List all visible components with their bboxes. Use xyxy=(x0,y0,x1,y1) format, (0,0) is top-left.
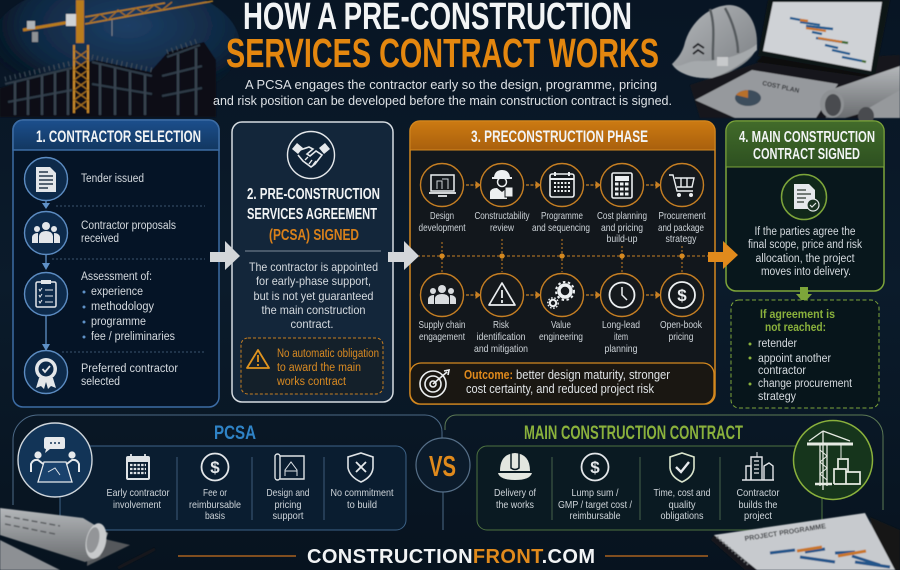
icon: fee dollar: $ xyxy=(210,458,220,477)
bottom row labels: identification xyxy=(476,331,526,343)
PCSA item labels xyxy=(106,487,394,522)
proposals text: received xyxy=(81,233,119,245)
VS badge xyxy=(416,438,470,492)
preferred contractor text xyxy=(81,363,178,388)
panel 2 description: The contractor is appointed xyxy=(249,260,378,274)
panel 4 description: If the parties agree the xyxy=(754,226,856,238)
callout options list: appoint another xyxy=(758,353,831,365)
image: project programme notebook: PROJECT PROGRAMME xyxy=(744,523,827,543)
icon: preferred contractor badge xyxy=(24,350,68,394)
top row labels: Procurement xyxy=(658,210,706,222)
icon: lump sum dollar: $ xyxy=(590,458,600,477)
subtitle: A PCSA engages the contractor early so the design, programme, pricing xyxy=(245,77,657,92)
callout options list: contractor xyxy=(758,365,806,377)
comparison: main construction contract xyxy=(445,415,883,530)
main contract item labels: reimbursable xyxy=(570,510,621,522)
panel 4: main construction contract signed xyxy=(726,121,884,291)
callout options list xyxy=(748,338,853,403)
top row labels: Cost planning xyxy=(597,210,647,222)
warning callout xyxy=(241,338,383,394)
icon: programme calendar xyxy=(540,164,584,206)
icon: cost calculator xyxy=(600,164,644,206)
top row labels: Constructability xyxy=(474,210,530,222)
panel 2 heading xyxy=(247,186,380,244)
panel 1 header xyxy=(13,120,219,150)
icon: signed contract xyxy=(782,174,826,220)
top row labels: and sequencing xyxy=(532,222,590,234)
bottom row labels: planning xyxy=(604,343,638,355)
main contract item labels: Contractor xyxy=(736,487,780,499)
icon: meeting over plans xyxy=(18,423,92,497)
bottom row labels: pricing xyxy=(668,331,694,343)
PCSA item labels: support xyxy=(272,510,304,522)
top row labels: and pricing xyxy=(601,222,643,234)
assessment criteria list: methodology xyxy=(91,301,154,313)
icon: supply chain people xyxy=(420,274,464,316)
bottom row labels: item xyxy=(614,331,628,343)
panel 4 header xyxy=(726,121,884,167)
panel 2 description: contract. xyxy=(290,317,334,331)
image: project programme notebook xyxy=(711,513,900,570)
icon: obligations shield xyxy=(670,453,694,482)
arrow: stage 2 to stage 3 xyxy=(388,241,419,270)
icon: design drawing roll xyxy=(275,454,304,480)
warning text xyxy=(276,348,379,388)
main contract item labels: quality xyxy=(668,499,696,511)
PCSA item labels: Early contractor xyxy=(106,487,170,499)
top row labels xyxy=(418,210,706,245)
warning text: No automatic obligation xyxy=(277,348,379,360)
bottom row labels: Supply chain xyxy=(418,319,466,331)
preferred contractor text: selected xyxy=(81,376,120,388)
bottom row labels: Long-lead xyxy=(602,319,640,331)
bottom row labels: Open-book xyxy=(660,319,703,331)
bottom row labels: engineering xyxy=(539,331,583,343)
outcome box xyxy=(410,363,714,404)
bottom row labels: engagement xyxy=(419,331,465,343)
icon: lump sum dollar xyxy=(582,454,608,480)
timeline axis xyxy=(412,182,708,298)
icon: early involvement calendar xyxy=(126,454,150,480)
assessment criteria list: Assessment of: xyxy=(81,271,152,283)
top row labels: strategy xyxy=(666,233,697,245)
laptop with gantt chart xyxy=(756,0,890,79)
cost plan sheet: COST PLAN xyxy=(762,80,800,95)
callout heading: not reached: xyxy=(765,320,826,334)
PCSA item labels: basis xyxy=(205,510,225,522)
icon: no commitment shield xyxy=(348,453,373,482)
proposals text: Contractor proposals xyxy=(81,220,176,232)
image: crane and building under construction xyxy=(0,0,240,117)
icon: buildings xyxy=(742,452,774,480)
panel 1 heading: 1. CONTRACTOR SELECTION xyxy=(36,127,201,146)
connector arrowheads xyxy=(42,203,50,351)
subtitle xyxy=(213,77,672,108)
tender issued text: Tender issued xyxy=(81,173,144,185)
icon: value engineering gears xyxy=(540,274,584,316)
icon: assessment clipboard xyxy=(24,272,68,316)
panel 4 description: final scope, price and risk xyxy=(748,239,862,251)
icon: tender document xyxy=(24,158,68,200)
bottom row labels: and mitigation xyxy=(474,343,528,355)
main contract item labels: Lump sum / xyxy=(572,487,619,499)
icon: contractors group xyxy=(24,212,68,254)
main contract item labels: GMP / target cost / xyxy=(558,499,632,511)
top row labels: build-up xyxy=(606,233,638,245)
callout options list: retender xyxy=(758,338,797,350)
top row labels: Programme xyxy=(541,210,583,222)
main contract heading: MAIN CONSTRUCTION CONTRACT xyxy=(524,423,743,444)
PCSA heading: PCSA xyxy=(214,423,256,444)
PCSA item labels: reimbursable xyxy=(189,499,241,511)
top row labels: and package xyxy=(658,222,704,234)
PCSA item labels: No commitment xyxy=(330,487,394,499)
icon: risk warning xyxy=(480,274,524,316)
arrow: stage 1 to stage 2 xyxy=(210,241,240,270)
panel 2 heading: 2. PRE-CONSTRUCTION xyxy=(247,186,380,203)
panel 2: PCSA signed xyxy=(232,122,393,402)
icon: hard hat xyxy=(498,453,532,480)
outcome text: Outcome: xyxy=(464,368,513,382)
panel 4 description: allocation, the project xyxy=(756,253,855,265)
main contract item labels: the works xyxy=(496,499,534,511)
panel 2 description xyxy=(249,260,378,331)
panel 4 heading xyxy=(739,129,875,163)
assessment criteria list xyxy=(81,271,175,343)
icon: open-book pricing dollar: $ xyxy=(677,286,687,305)
panel 2 description: for early-phase support, xyxy=(256,274,371,288)
icon: warning triangle xyxy=(247,350,269,368)
PCSA items box xyxy=(60,446,406,530)
image: safety helmet, laptop, cost plan and rolled drawings xyxy=(672,0,900,125)
top row labels: Design xyxy=(430,210,454,222)
icon: handshake xyxy=(288,132,334,178)
callout: if agreement is not reached xyxy=(731,300,879,408)
top row labels: development xyxy=(418,222,466,234)
callout heading: If agreement is xyxy=(760,307,835,321)
icon: tower crane and structure xyxy=(794,420,872,500)
comparison: PCSA xyxy=(13,415,443,530)
main contract item labels: obligations xyxy=(660,510,704,522)
callout options list: change procurement xyxy=(758,378,853,390)
panel 4 description xyxy=(748,226,862,278)
PCSA item labels: to build xyxy=(347,499,377,511)
icon: procurement cart xyxy=(660,164,704,206)
footer brand text: CONSTRUCTIONFRONT.COM xyxy=(307,546,595,568)
panel 3 header xyxy=(410,121,715,150)
icon: constructability review xyxy=(480,164,524,206)
outcome text: better design maturity, stronger xyxy=(516,368,670,382)
PCSA item labels: Fee or xyxy=(203,487,227,499)
panel 2 description: but is not yet guaranteed xyxy=(254,289,374,303)
arrow: panel 4 to fallback box xyxy=(796,287,812,303)
callout options list: strategy xyxy=(758,391,796,403)
bottom row labels xyxy=(418,319,703,355)
top row labels: review xyxy=(490,222,514,234)
PCSA item labels: involvement xyxy=(113,499,161,511)
icon: target xyxy=(420,370,449,397)
step connectors xyxy=(45,201,47,345)
panel 2 heading: SERVICES AGREEMENT xyxy=(247,206,377,223)
icon: open-book pricing dollar xyxy=(660,274,704,316)
icon: fee dollar xyxy=(202,454,228,480)
icon: design development xyxy=(420,164,464,206)
main contract item labels: Time, cost and xyxy=(654,487,711,499)
icon: long-lead clock xyxy=(600,274,644,316)
assessment criteria list: experience xyxy=(91,286,143,298)
main contract item labels: builds the xyxy=(738,499,778,511)
outcome text xyxy=(464,368,670,396)
panel 4 description: moves into delivery. xyxy=(761,266,851,278)
panel 1: contractor selection xyxy=(13,120,219,407)
bottom row labels: Risk xyxy=(493,319,510,331)
warning text: works contract xyxy=(276,376,347,388)
panel 2 description: the main construction xyxy=(262,303,366,317)
preferred contractor text: Preferred contractor xyxy=(81,363,178,375)
cost plan sheet xyxy=(695,70,838,118)
panel 3: preconstruction phase xyxy=(410,121,715,404)
warning text: to award the main xyxy=(277,362,361,374)
title xyxy=(226,0,659,76)
arrow: stage 3 to stage 4 xyxy=(708,241,738,269)
main contract item labels: project xyxy=(744,510,772,522)
main contract item labels xyxy=(494,487,780,522)
main contract item labels: Delivery of xyxy=(494,487,536,499)
subtitle: and risk position can be developed before the main construction contract is signed. xyxy=(213,93,672,108)
panel 2 heading: (PCSA) SIGNED xyxy=(269,227,359,244)
panel 3 heading: 3. PRECONSTRUCTION PHASE xyxy=(471,127,648,146)
bottom row labels: Value xyxy=(551,319,571,331)
assessment criteria list: fee / preliminaries xyxy=(91,331,175,343)
PCSA item labels: Design and xyxy=(266,487,310,499)
proposals text xyxy=(81,220,176,245)
callout heading xyxy=(760,307,835,334)
assessment criteria list: programme xyxy=(91,316,146,328)
title: SERVICES CONTRACT WORKS xyxy=(226,30,659,76)
PCSA item labels: pricing xyxy=(274,499,302,511)
outcome text: cost certainty, and reduced project risk xyxy=(466,382,655,396)
VS badge: VS xyxy=(429,451,456,483)
image: rolled blueprints and pen xyxy=(0,508,155,570)
main contract items box xyxy=(477,446,822,530)
